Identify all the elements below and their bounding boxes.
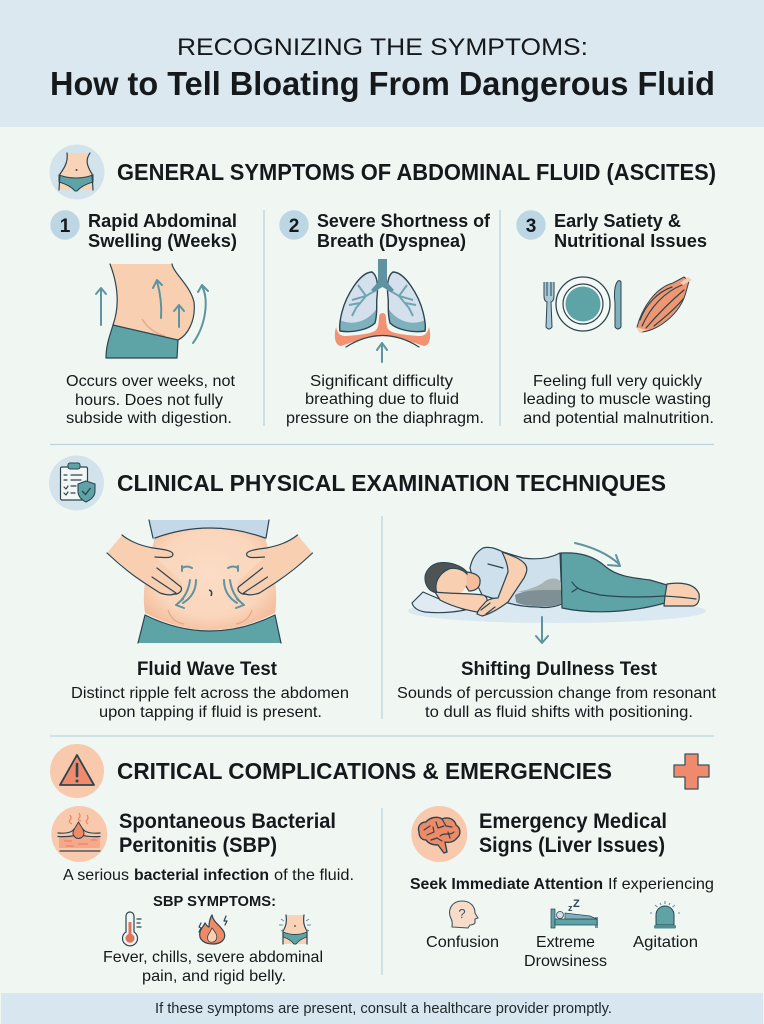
SBP description	[63, 867, 354, 884]
title line 2: How to Tell Bloating From Dangerous Fluid	[50, 65, 715, 102]
fluid wave description: Distinct ripple felt across the abdomen	[71, 685, 349, 702]
footer banner	[1, 993, 763, 1024]
SBP symptoms text	[103, 949, 323, 985]
symptom labels: Extreme	[536, 934, 595, 951]
illustration: person lying on side	[408, 543, 706, 643]
item 2 title	[317, 210, 491, 251]
item 2 title: Breath (Dyspnea)	[317, 230, 466, 251]
heading: GENERAL SYMPTOMS OF ABDOMINAL FLUID (ASCITES)	[117, 159, 716, 185]
number badge 2	[279, 210, 309, 240]
icon: thermometer	[122, 912, 141, 946]
icon: confused head: ?	[458, 906, 466, 921]
item 2 description	[286, 373, 484, 427]
shifting dullness title: Shifting Dullness Test	[461, 659, 658, 680]
item 2 title: Severe Shortness of	[317, 210, 491, 231]
emergency lead text: If experiencing	[608, 876, 714, 893]
panel: shifting dullness test	[397, 543, 717, 721]
item 1 title: Swelling (Weeks)	[88, 230, 237, 251]
SBP description: bacterial infection	[134, 867, 269, 884]
emergency lead text: Seek Immediate Attention	[410, 876, 603, 893]
illustration: hands on abdomen	[107, 520, 312, 643]
SBP symptoms text: pain, and rigid belly.	[142, 968, 286, 985]
symptom labels: Agitation	[633, 934, 698, 951]
illustration: muscle	[636, 277, 692, 333]
icon: rigid abdomen	[279, 915, 311, 944]
symptom labels: Confusion	[426, 934, 499, 951]
item 3 title	[554, 210, 707, 251]
header banner	[0, 0, 764, 127]
item 3 title: Early Satiety &	[554, 210, 681, 231]
symptom labels	[426, 934, 698, 970]
SBP symptoms label: SBP SYMPTOMS:	[153, 894, 276, 910]
fluid wave description	[71, 685, 349, 721]
icon: bed with zzz	[551, 898, 598, 928]
icon: bed with zzz: z	[568, 903, 573, 913]
item 3 description: Feeling full very quickly	[533, 373, 702, 390]
number badge 2: 2	[289, 216, 299, 237]
SBP title: Spontaneous Bacterial	[119, 810, 336, 833]
item 3 description: and potential malnutrition.	[523, 410, 714, 427]
SBP symptoms text: Fever, chills, severe abdominal	[103, 949, 323, 966]
symptom labels: Drowsiness	[524, 953, 607, 970]
SBP title: Peritonitis (SBP)	[119, 834, 277, 857]
section: clinical examination	[49, 456, 717, 721]
item 2 description: Significant difficulty	[310, 373, 453, 390]
number badge 1	[50, 210, 80, 240]
emergency title	[479, 810, 667, 857]
item 1 title: Rapid Abdominal	[88, 210, 237, 231]
icon: brain	[411, 806, 467, 862]
emergency lead text	[410, 876, 714, 893]
item 1 title	[88, 210, 237, 251]
item 2 description: pressure on the diaphragm.	[286, 410, 484, 427]
icon: confused head	[450, 901, 478, 928]
title line 1: RECOGNIZING THE SYMPTOMS:	[177, 34, 588, 61]
item 1 description: subside with digestion.	[66, 410, 232, 427]
shifting dullness description	[397, 685, 717, 721]
panel: spontaneous bacterial peritonitis	[51, 806, 354, 985]
panel: emergency medical signs	[410, 806, 714, 970]
icon: bed with zzz: Z	[573, 898, 580, 910]
fluid wave description: upon tapping if fluid is present.	[99, 704, 322, 721]
footer note: If these symptoms are present, consult a healthcare provider promptly.	[155, 1001, 612, 1017]
number badge 3: 3	[526, 216, 536, 237]
item 3 title: Nutritional Issues	[554, 230, 707, 251]
emergency title: Emergency Medical	[479, 810, 667, 833]
section: critical complications	[50, 744, 714, 985]
icon: alarm siren	[650, 901, 680, 928]
icon: clipboard with shield	[49, 456, 104, 510]
icon: flame	[199, 915, 227, 944]
illustration: swollen belly	[96, 264, 208, 358]
fluid wave title: Fluid Wave Test	[137, 659, 278, 680]
number badge 3	[516, 210, 546, 240]
item 1 description: hours. Does not fully	[75, 392, 223, 409]
item 3: early satiety	[516, 210, 714, 427]
item 2 description: breathing due to fluid	[305, 391, 459, 408]
heading: CLINICAL PHYSICAL EXAMINATION TECHNIQUES	[117, 470, 666, 496]
illustration: lungs and diaphragm	[335, 259, 430, 362]
section: general symptoms	[50, 144, 716, 427]
SBP description: A serious	[63, 867, 129, 884]
illustration: plate with cutlery	[544, 277, 621, 331]
SBP title	[119, 810, 336, 857]
item 1: rapid swelling	[50, 210, 237, 427]
item 3 description	[523, 373, 714, 427]
item 1 description: Occurs over weeks, not	[66, 373, 236, 390]
item 3 description: leading to muscle wasting	[523, 391, 711, 408]
item 2: shortness of breath	[279, 210, 491, 427]
item 1 description	[66, 373, 236, 427]
icon: abdomen	[50, 144, 104, 200]
emergency title: Signs (Liver Issues)	[479, 834, 665, 857]
icon: inflamed tissue	[51, 806, 107, 862]
heading: CRITICAL COMPLICATIONS & EMERGENCIES	[117, 758, 612, 784]
panel: fluid wave test	[71, 520, 349, 721]
shifting dullness description: to dull as fluid shifts with positioning.	[425, 704, 693, 721]
number badge 1: 1	[60, 216, 71, 237]
icon: medical cross	[674, 754, 709, 789]
icon: warning triangle	[50, 744, 104, 798]
SBP description: of the fluid.	[274, 867, 354, 884]
shifting dullness description: Sounds of percussion change from resonant	[397, 685, 717, 702]
